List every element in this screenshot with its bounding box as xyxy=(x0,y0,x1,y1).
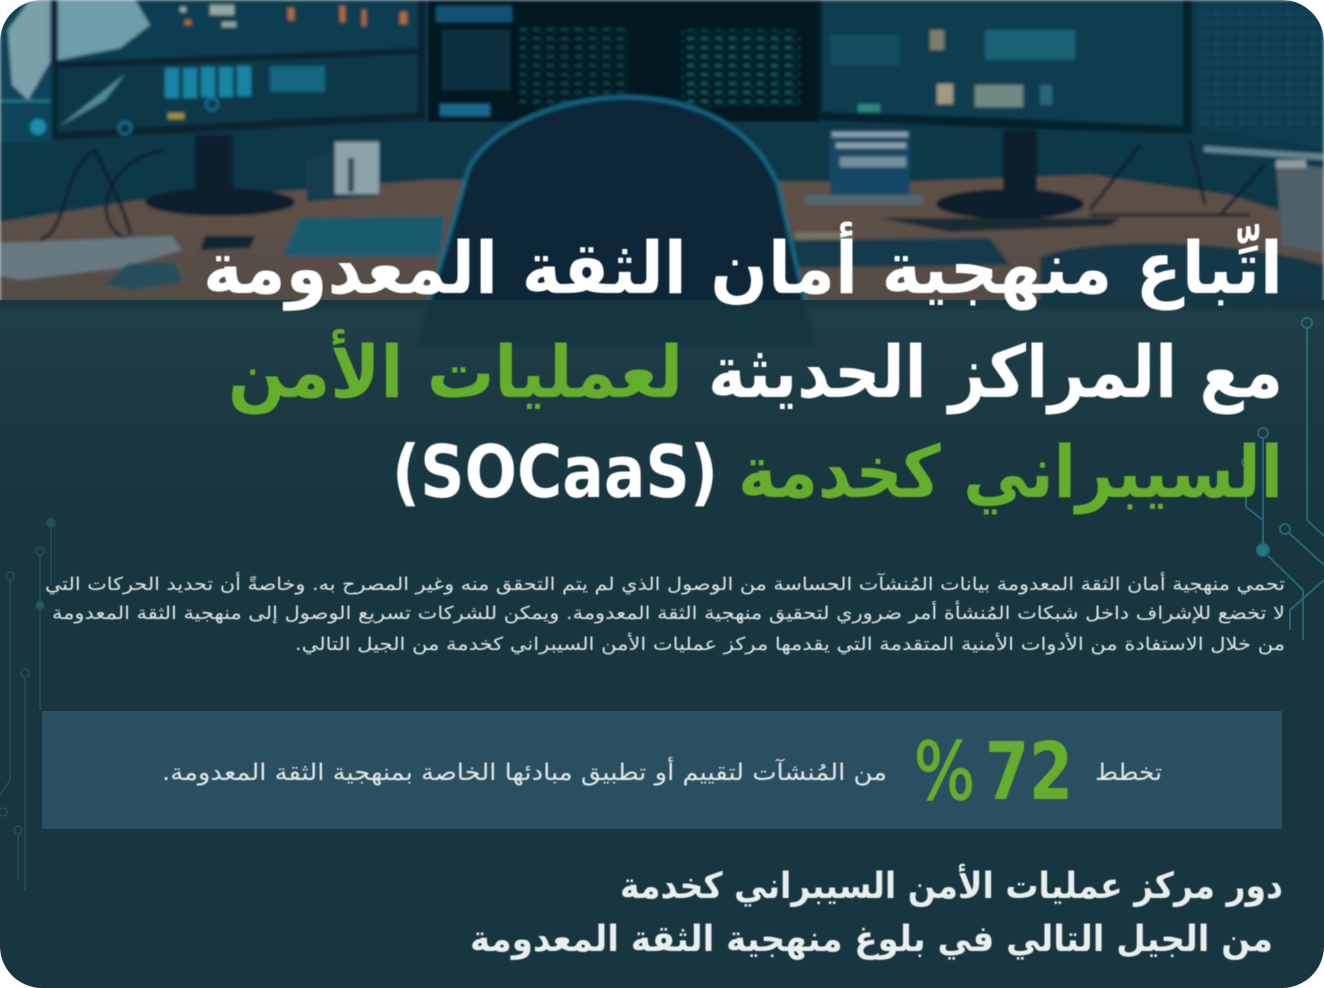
intro paragraph: من خلال الاستفادة من الأدوات الأمنية المتقدمة التي يقدمها مركز عمليات الأمن السيبراني كخدمة من الجيل التالي. xyxy=(295,633,1285,655)
intro paragraph xyxy=(45,572,1285,655)
background photo: security operations desk xyxy=(0,0,1324,345)
far left monitor xyxy=(0,0,52,142)
cup xyxy=(1276,162,1324,252)
title: لعمليات الأمن xyxy=(228,328,683,415)
intro paragraph: تحمي منهجية أمان الثقة المعدومة بيانات المُنشآت الحساسة من الوصول الذي لم يتم التحقق منه وغير المصرح به. وخاصةً أن تحديد الحركات التي xyxy=(45,572,1285,595)
stat value: 72: 72 xyxy=(985,726,1073,818)
section heading: دور مركز عمليات الأمن السيبراني كخدمة xyxy=(620,863,1283,907)
circuit lines left xyxy=(0,519,55,890)
stat description: من المُنشآت لتقييم أو تطبيق مبادئها الخاصة بمنهجية الثقة المعدومة. xyxy=(162,757,887,786)
tablets xyxy=(305,130,923,205)
left monitor xyxy=(52,0,425,140)
right monitor xyxy=(818,0,1192,134)
monitor stands xyxy=(145,130,1120,232)
keyboards and mouse xyxy=(0,216,1324,305)
section heading xyxy=(470,863,1283,960)
title: السيبراني كخدمة xyxy=(738,430,1283,515)
stat value: percent sign: % xyxy=(914,726,975,818)
photo tone overlay xyxy=(0,0,1324,300)
title xyxy=(203,221,1283,515)
cables xyxy=(40,140,1265,240)
section heading: من الجيل التالي في بلوغ منهجية الثقة المعدومة xyxy=(470,919,1273,960)
circuit lines right xyxy=(1242,318,1324,640)
intro paragraph: لا تخضع للإشراف داخل شبكات المُنشأة أمر ضروري لتحقيق منهجية الثقة المعدومة. ويمكن للشركات تسريع الوصول إلى منهجية الثقة المعدومة xyxy=(52,600,1285,624)
chair xyxy=(418,97,815,345)
stat label: plan: تخطط xyxy=(1095,760,1162,786)
title: (SOCaaS) xyxy=(392,430,718,514)
far right monitor xyxy=(1196,0,1324,148)
desk surface xyxy=(0,175,1324,310)
dark content panel xyxy=(0,300,1324,988)
stat panel xyxy=(42,711,1282,829)
centre monitor xyxy=(428,0,818,122)
title: اتِّباع منهجية أمان الثقة المعدومة xyxy=(203,221,1283,311)
